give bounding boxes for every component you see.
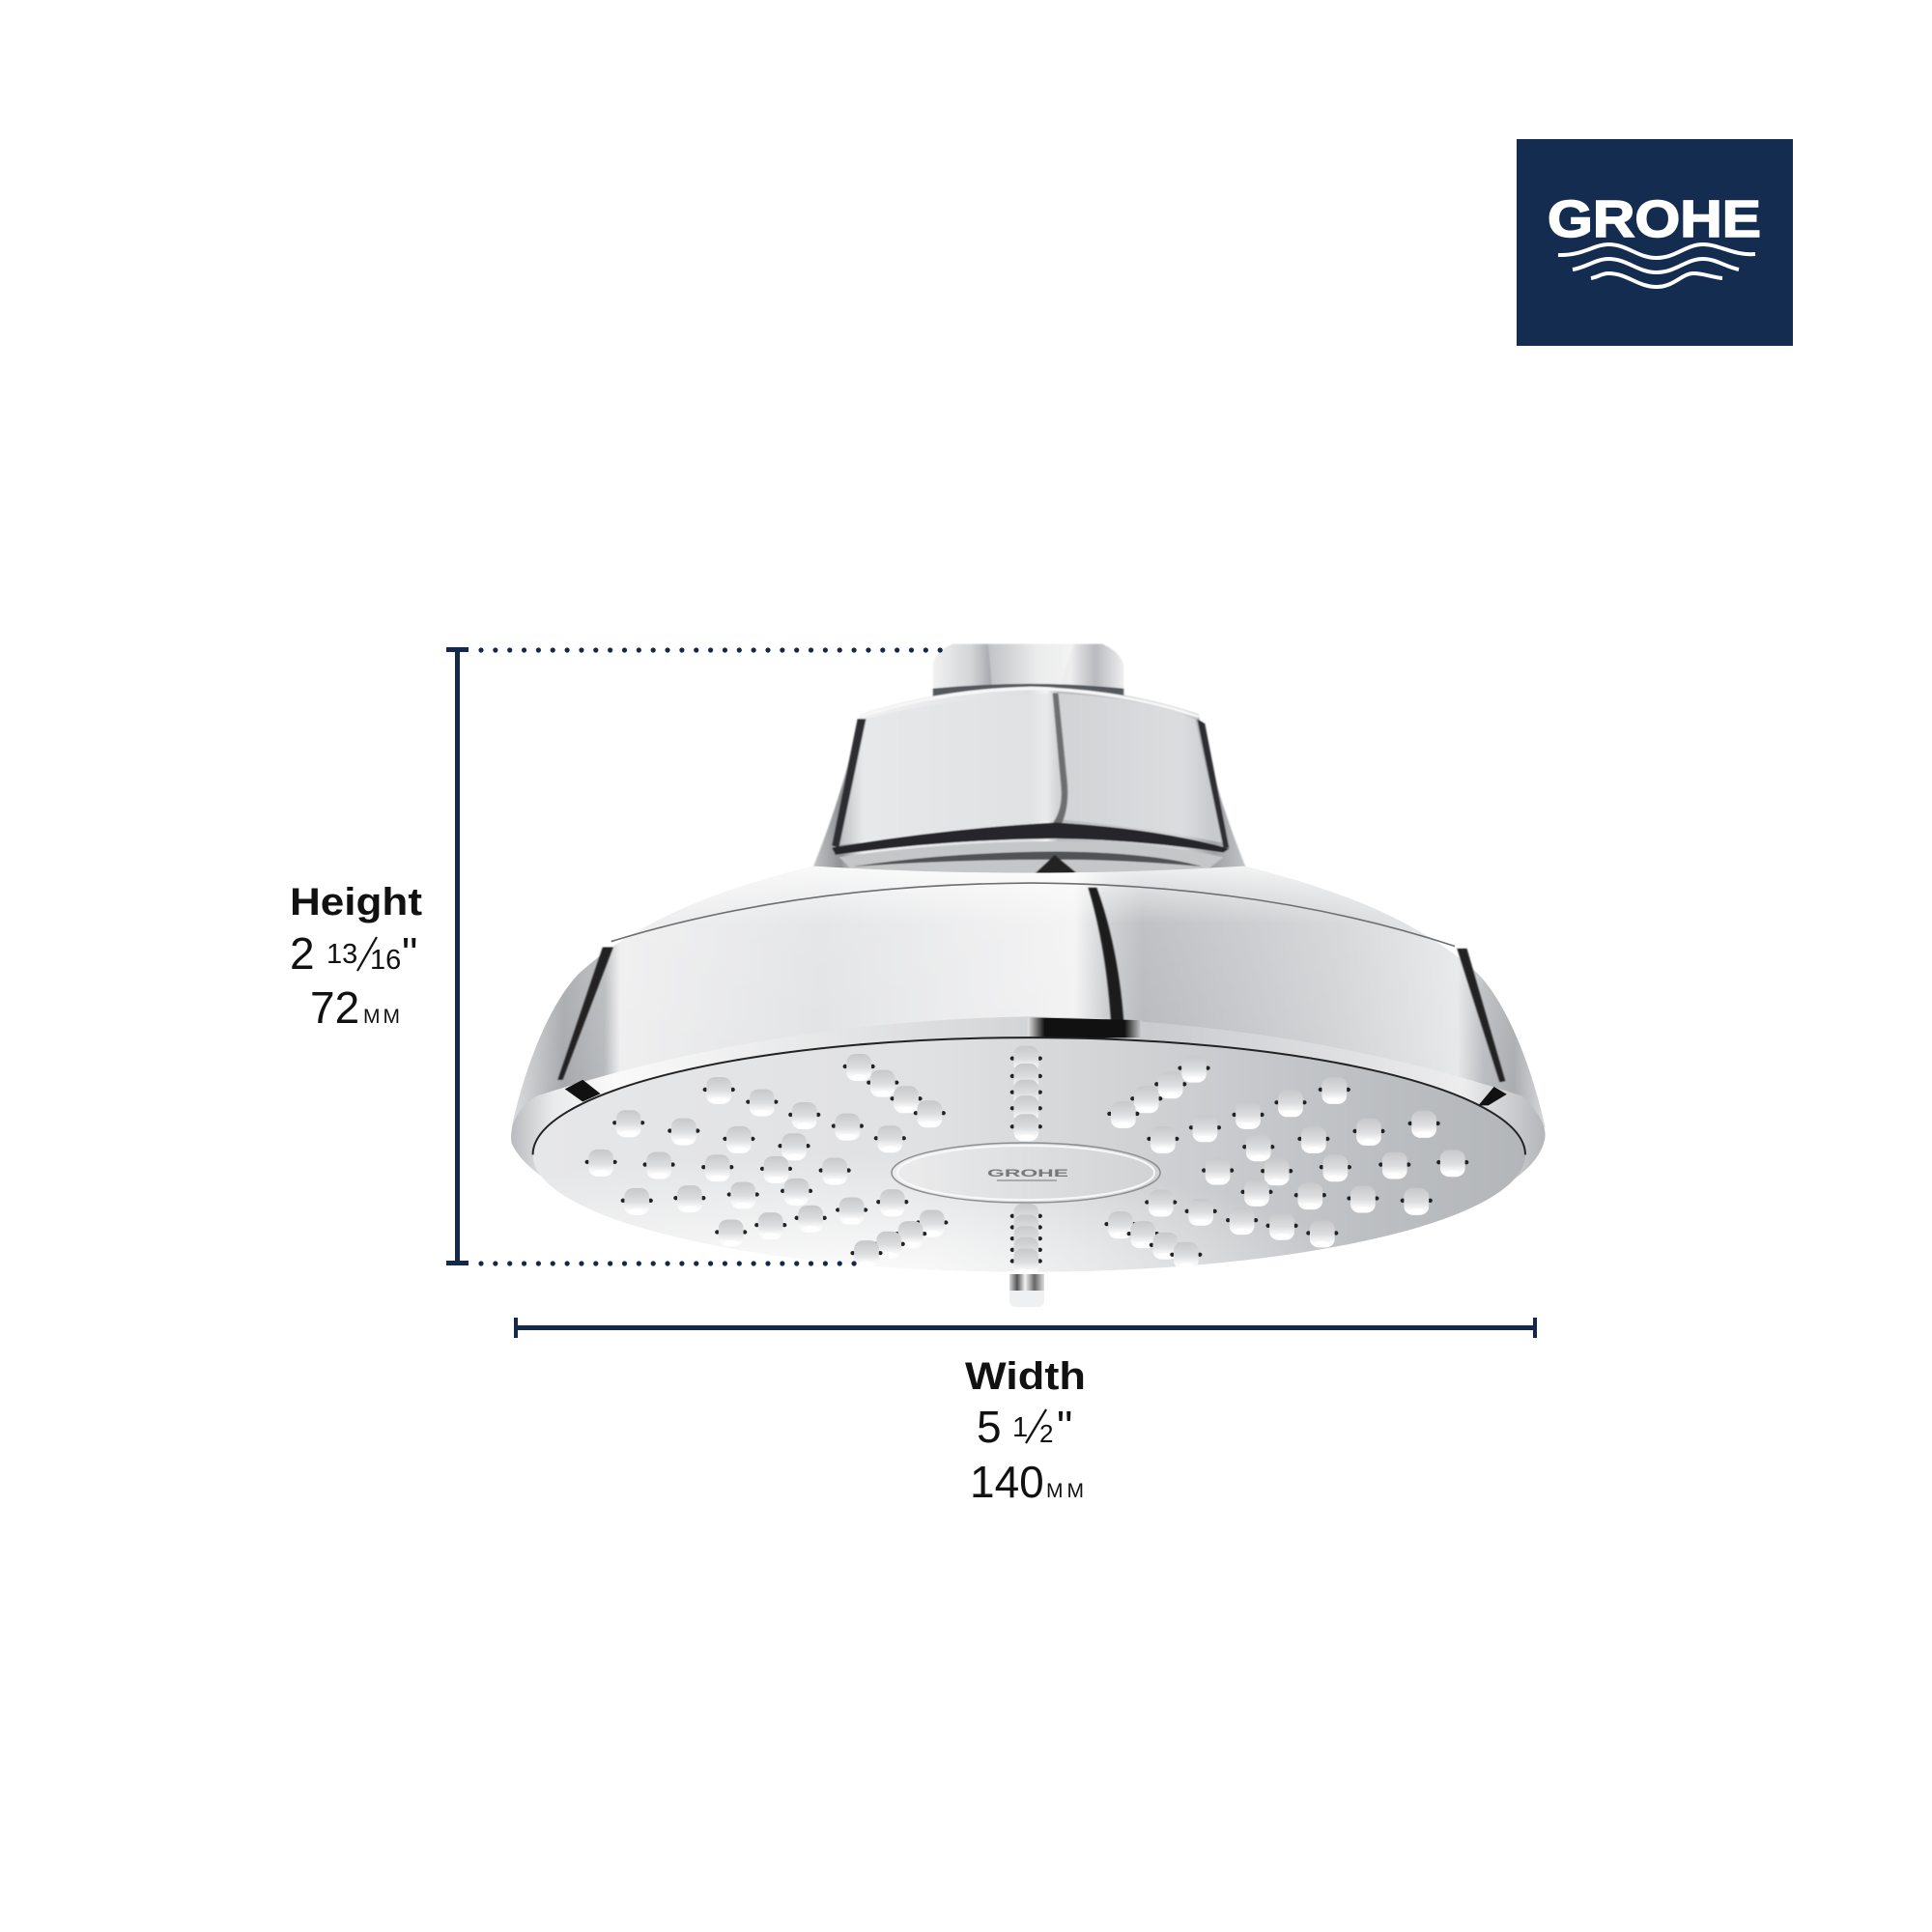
- central reflection: [1088, 888, 1123, 1021]
- top dotted guide: [481, 647, 946, 653]
- bottom pin: [1009, 1274, 1044, 1307]
- logo waves: [1558, 244, 1755, 287]
- width label: 1: [1012, 1412, 1028, 1443]
- height label: [290, 881, 422, 1033]
- bell right dark edge: [1197, 719, 1229, 848]
- left reflection: [557, 947, 613, 1080]
- height label: 72: [310, 982, 359, 1033]
- disc logo text: GROHE: [987, 1168, 1068, 1179]
- height label: ": [402, 928, 417, 979]
- height label: 13: [327, 939, 357, 970]
- bottom dotted guide: [481, 1261, 855, 1266]
- spray face: [533, 1037, 1525, 1272]
- spray nozzles left half: [585, 1046, 1042, 1275]
- height label: 16: [370, 945, 401, 976]
- height label: 2: [290, 928, 315, 979]
- shower head product image: [511, 644, 1546, 1307]
- height dimension line: [446, 647, 469, 1265]
- width label: [965, 1355, 1086, 1507]
- spray nozzles right half: [1104, 1056, 1468, 1269]
- bell upper ridge: [861, 689, 1199, 717]
- height label: Height: [290, 881, 422, 923]
- bell centre edge: [1051, 694, 1067, 825]
- width label: ": [1057, 1402, 1072, 1452]
- center logo disc: [892, 1143, 1160, 1203]
- bell lower reflection: [832, 822, 1229, 855]
- seam line: [611, 883, 1455, 947]
- shade body: [511, 867, 1546, 1127]
- width label: MM: [1046, 1480, 1084, 1502]
- logo wordmark: GROHE: [1548, 190, 1761, 248]
- right reflection: [1457, 949, 1505, 1082]
- logo: GROHE: [1517, 139, 1793, 346]
- bell collar: [810, 686, 1248, 873]
- width label: Width: [965, 1355, 1086, 1398]
- width label: 5: [977, 1402, 1002, 1452]
- rim: [511, 1016, 1546, 1223]
- bell left dark edge: [832, 719, 867, 848]
- hex nut: [933, 644, 1123, 697]
- rim dark highlight: [1028, 1017, 1142, 1039]
- width label: 2: [1039, 1419, 1053, 1448]
- width label: 140: [970, 1457, 1044, 1507]
- height label: MM: [363, 1006, 400, 1028]
- bell lit panel: [838, 694, 1223, 845]
- width dimension line: [514, 1318, 1537, 1338]
